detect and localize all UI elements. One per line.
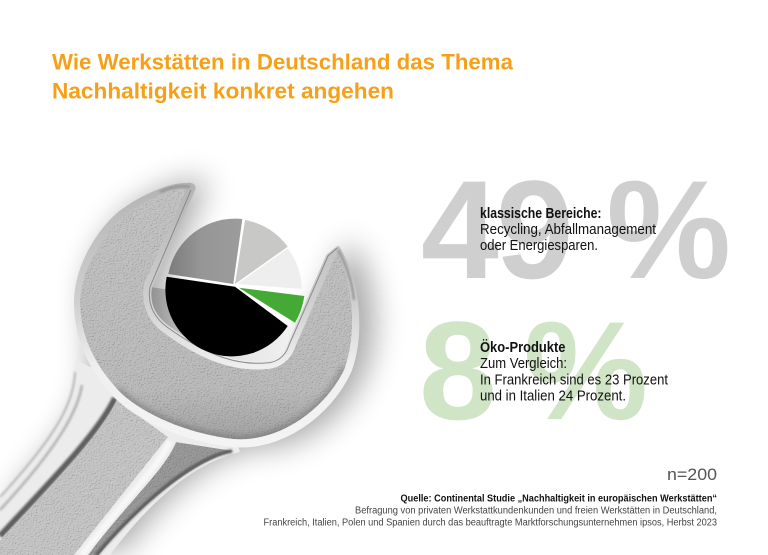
stat text: eco products: Zum Vergleich: [480, 356, 567, 372]
title [52, 50, 513, 104]
pie chart [165, 219, 304, 356]
stat text: classic areas: Recycling, Abfallmanagement [480, 222, 656, 238]
handle dark channel [88, 442, 234, 555]
source note [264, 494, 717, 528]
slice: black [165, 277, 288, 356]
wrench illustration [0, 179, 375, 555]
head textured face [80, 189, 352, 439]
source note: Quelle: Continental Studie „Nachhaltigkeit in europäischen Werkstätten“ [400, 494, 717, 504]
handle ridge [82, 441, 170, 555]
slice: mid grey [235, 220, 288, 284]
slice: light grey [237, 248, 302, 289]
handle silhouette [0, 360, 240, 555]
source note: Befragung von privaten Werkstattkundenkunden und freien Werkstätten in Deutschland, [355, 506, 717, 516]
stat text: eco products: und in Italien 24 Prozent. [480, 388, 626, 404]
stat text: classic areas [480, 206, 656, 254]
jaw edge line [149, 190, 337, 363]
source note: Frankreich, Italien, Polen und Spanien durch das beauftragte Marktforschungsunternehmen ipsos, Herbst 2023 [264, 518, 717, 528]
stat text: classic areas: oder Energiesparen. [480, 238, 598, 254]
title: Nachhaltigkeit konkret angehen [52, 78, 394, 104]
stat text: eco products: Öko-Produkte [480, 339, 566, 356]
sample size: n=200 [667, 466, 717, 484]
slice: green 8 percent [239, 288, 304, 323]
head rim [76, 185, 357, 445]
slice: dark grey [168, 219, 242, 284]
stat text: eco products: In Frankreich sind es 23 Prozent [480, 372, 668, 388]
handle face [0, 400, 168, 555]
stat: 49 percent: 49 % [421, 151, 731, 308]
stat: 8 percent: 8 % [419, 292, 648, 449]
stat text: classic areas: klassische Bereiche: [480, 206, 602, 222]
jaw crescent [149, 287, 296, 363]
stat text: eco products [480, 339, 668, 404]
title: Wie Werkstätten in Deutschland das Thema [52, 50, 513, 74]
jaw tip highlights [160, 186, 354, 300]
